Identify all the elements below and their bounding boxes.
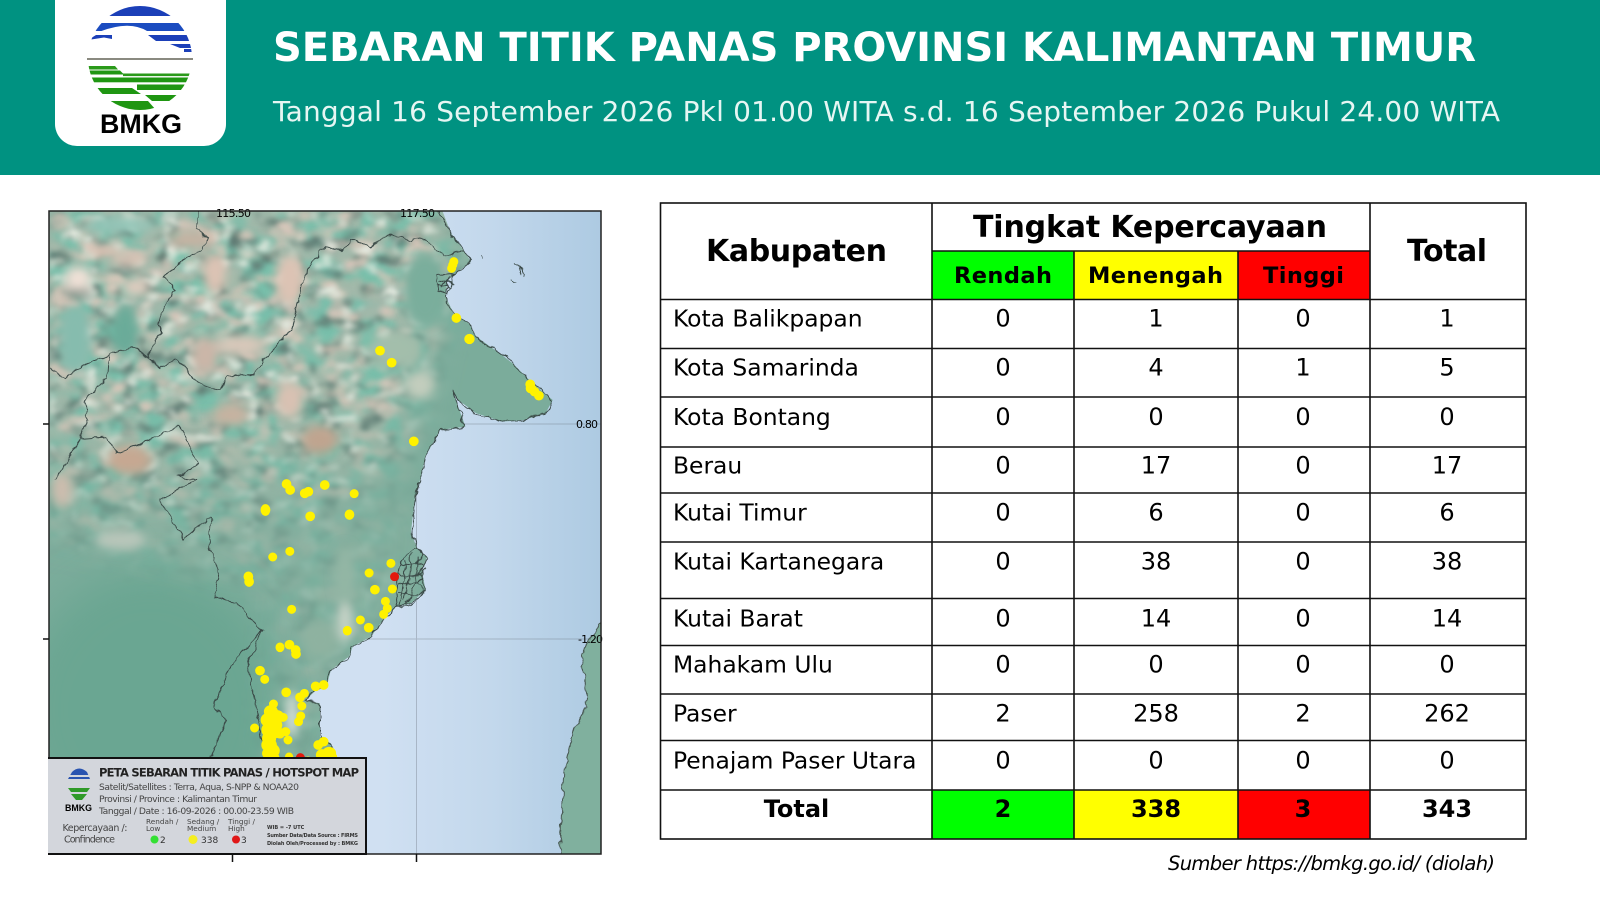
legend confidence key: 338 xyxy=(201,836,218,846)
row: Kota Balikpapan xyxy=(673,305,1455,333)
row: Total: Total xyxy=(764,795,829,823)
table: hotspots per kabupaten xyxy=(660,203,1526,839)
legend details xyxy=(98,782,299,817)
row: Penajam Paser Utara: 0 xyxy=(1295,746,1311,774)
legend source notes xyxy=(267,825,358,847)
legend details: Provinsi / Province : Kalimantan Timur xyxy=(99,794,257,805)
legend source notes: Diolah Oleh/Processed by : BMKG xyxy=(267,841,358,847)
row: Mahakam Ulu: Mahakam Ulu xyxy=(673,651,833,679)
source note: Sumber https://bmkg.go.id/ (diolah) xyxy=(1168,852,1495,875)
row: Kutai Timur: 0 xyxy=(995,498,1011,526)
longitude and latitude labels: -1.20 xyxy=(578,633,603,646)
row: Kota Samarinda: 0 xyxy=(995,353,1011,381)
row: Paser: 2 xyxy=(995,700,1011,728)
table column headings xyxy=(706,210,1487,289)
legend confidence key: 2 xyxy=(160,836,166,846)
legend confidence key: 3 xyxy=(241,836,247,846)
row: Kota Bontang: Kota Bontang xyxy=(673,403,831,431)
table column headings: Rendah xyxy=(954,263,1052,289)
row: Berau: Berau xyxy=(673,452,742,480)
sea background xyxy=(306,212,600,854)
row: Penajam Paser Utara xyxy=(673,746,1455,774)
row: Kutai Barat: 14 xyxy=(1141,605,1171,633)
row: Berau: 0 xyxy=(995,452,1011,480)
legend source notes: Sumber Data/Data Source : FIRMS xyxy=(267,833,358,839)
table grid xyxy=(660,203,1526,839)
row: Kota Bontang: 0 xyxy=(1439,403,1455,431)
row: Mahakam Ulu xyxy=(673,651,1455,679)
legend details: Satelit/Satellites : Terra, Aqua, S-NPP & NOAA20 xyxy=(99,782,299,793)
row: Kutai Barat: 14 xyxy=(1432,605,1462,633)
row: Kota Samarinda: Kota Samarinda xyxy=(673,353,859,381)
row: Berau: 17 xyxy=(1141,452,1171,480)
logo: BMKG xyxy=(55,0,226,146)
legend confidence key: Kepercayaan /: xyxy=(62,823,128,834)
map legend box xyxy=(48,758,366,854)
hotspot dots: red high confidence xyxy=(296,573,399,762)
row: Kota Balikpapan: 0 xyxy=(1295,305,1311,333)
row: Kutai Kartanegara: 38 xyxy=(1432,548,1462,576)
subtitle: date range: Tanggal 16 September 2026 Pkl 01.00 WITA s.d. 16 September 2026 Pukul 24.00 WITA xyxy=(272,95,1500,128)
mini BMKG logo xyxy=(65,768,92,814)
row: Kutai Kartanegara: 0 xyxy=(995,548,1011,576)
legend confidence key: Sedang / xyxy=(187,817,220,826)
row: Penajam Paser Utara: 0 xyxy=(995,746,1011,774)
row: Kutai Timur xyxy=(673,498,1455,526)
row: Kota Bontang: 0 xyxy=(995,403,1011,431)
row: Penajam Paser Utara: Penajam Paser Utara xyxy=(673,746,916,774)
table column headings: Tingkat Kepercayaan xyxy=(973,210,1327,245)
row: Paser: Paser xyxy=(673,700,737,728)
terrain highlights xyxy=(52,217,447,737)
legend title: PETA SEBARAN TITIK PANAS / HOTSPOT MAP xyxy=(99,766,359,780)
coastline and province boundaries xyxy=(51,210,553,757)
land and terrain xyxy=(50,212,553,757)
legend confidence key: Low xyxy=(146,824,160,833)
row: Penajam Paser Utara: 0 xyxy=(1148,746,1164,774)
delta channels xyxy=(396,548,424,607)
row: Berau xyxy=(673,452,1462,480)
row: Kutai Barat xyxy=(673,605,1462,633)
logo: BMKG: BMKG xyxy=(100,109,182,139)
longitude and latitude labels: 115.50 xyxy=(216,207,251,220)
row: Total: 338 xyxy=(1131,795,1181,823)
row: Total: 2 xyxy=(995,795,1011,823)
row: Kutai Timur: Kutai Timur xyxy=(673,498,807,526)
longitude and latitude labels: 117.50 xyxy=(400,207,435,220)
row: Kota Samarinda xyxy=(673,353,1455,381)
row: Kutai Kartanegara: 38 xyxy=(1141,548,1171,576)
row: Kota Balikpapan: 1 xyxy=(1439,305,1455,333)
row: Kota Bontang xyxy=(673,403,1455,431)
row: Kota Balikpapan: 0 xyxy=(995,305,1011,333)
row: Kota Bontang: 0 xyxy=(1148,403,1164,431)
table column headings: Kabupaten xyxy=(706,234,887,269)
row: Paser: 2 xyxy=(1295,700,1311,728)
row: Mahakam Ulu: 0 xyxy=(995,651,1011,679)
longitude and latitude labels xyxy=(216,207,603,646)
map frame and ticks xyxy=(43,211,601,862)
table header colours xyxy=(932,251,1370,839)
row: Mahakam Ulu: 0 xyxy=(1295,651,1311,679)
row: Paser xyxy=(673,700,1470,728)
row: Paser: 258 xyxy=(1133,700,1179,728)
header banner xyxy=(0,0,1600,175)
hotspot dots: yellow medium confidence xyxy=(244,258,543,765)
row: Berau: 17 xyxy=(1432,452,1462,480)
row: Kutai Barat: 0 xyxy=(995,605,1011,633)
row: Kota Samarinda: 4 xyxy=(1148,353,1164,381)
mini BMKG logo: BMKG xyxy=(65,803,92,814)
Sulawesi coast xyxy=(558,622,600,854)
row: Kota Balikpapan: Kota Balikpapan xyxy=(673,305,863,333)
legend confidence key: High xyxy=(228,824,245,833)
row: Paser: 262 xyxy=(1424,700,1470,728)
legend confidence key: Confindence xyxy=(64,834,115,846)
legend confidence key: Medium xyxy=(187,824,216,833)
row: Kota Bontang: 0 xyxy=(1295,403,1311,431)
row: Mahakam Ulu: 0 xyxy=(1148,651,1164,679)
row: Kutai Barat: 0 xyxy=(1295,605,1311,633)
table column headings: Menengah xyxy=(1088,263,1223,289)
row: Berau: 0 xyxy=(1295,452,1311,480)
table column headings: Total xyxy=(1407,234,1487,269)
row: Mahakam Ulu: 0 xyxy=(1439,651,1455,679)
row: Kota Samarinda: 1 xyxy=(1295,353,1311,381)
longitude and latitude labels: 0.80 xyxy=(576,418,598,431)
row: Kutai Kartanegara: Kutai Kartanegara xyxy=(673,548,884,576)
row: Total: 343 xyxy=(1422,795,1472,823)
row: Kutai Timur: 0 xyxy=(1295,498,1311,526)
legend details: Tanggal / Date : 16-09-2026 : 00.00-23.59 WIB xyxy=(98,806,294,817)
legend confidence key xyxy=(62,817,255,846)
legend source notes: WIB = -7 UTC xyxy=(267,825,305,831)
row: Kutai Kartanegara: 0 xyxy=(1295,548,1311,576)
row: Kota Samarinda: 5 xyxy=(1439,353,1455,381)
row: Total xyxy=(764,795,1472,823)
row: Kutai Timur: 6 xyxy=(1148,498,1164,526)
panel: hotspot map xyxy=(20,207,607,862)
table column headings: Tinggi xyxy=(1263,263,1344,289)
legend confidence key: Tinggi / xyxy=(227,817,255,826)
row: Penajam Paser Utara: 0 xyxy=(1439,746,1455,774)
grid lines xyxy=(366,424,600,854)
row: Kutai Kartanegara xyxy=(673,548,1462,576)
row: Total: 3 xyxy=(1295,795,1311,823)
row: Kutai Barat: Kutai Barat xyxy=(673,605,803,633)
legend confidence key: Rendah / xyxy=(146,817,179,826)
row: Kutai Timur: 6 xyxy=(1439,498,1455,526)
title: SEBARAN TITIK PANAS PROVINSI KALIMANTAN TIMUR xyxy=(273,25,1476,71)
row: Kota Balikpapan: 1 xyxy=(1148,305,1164,333)
